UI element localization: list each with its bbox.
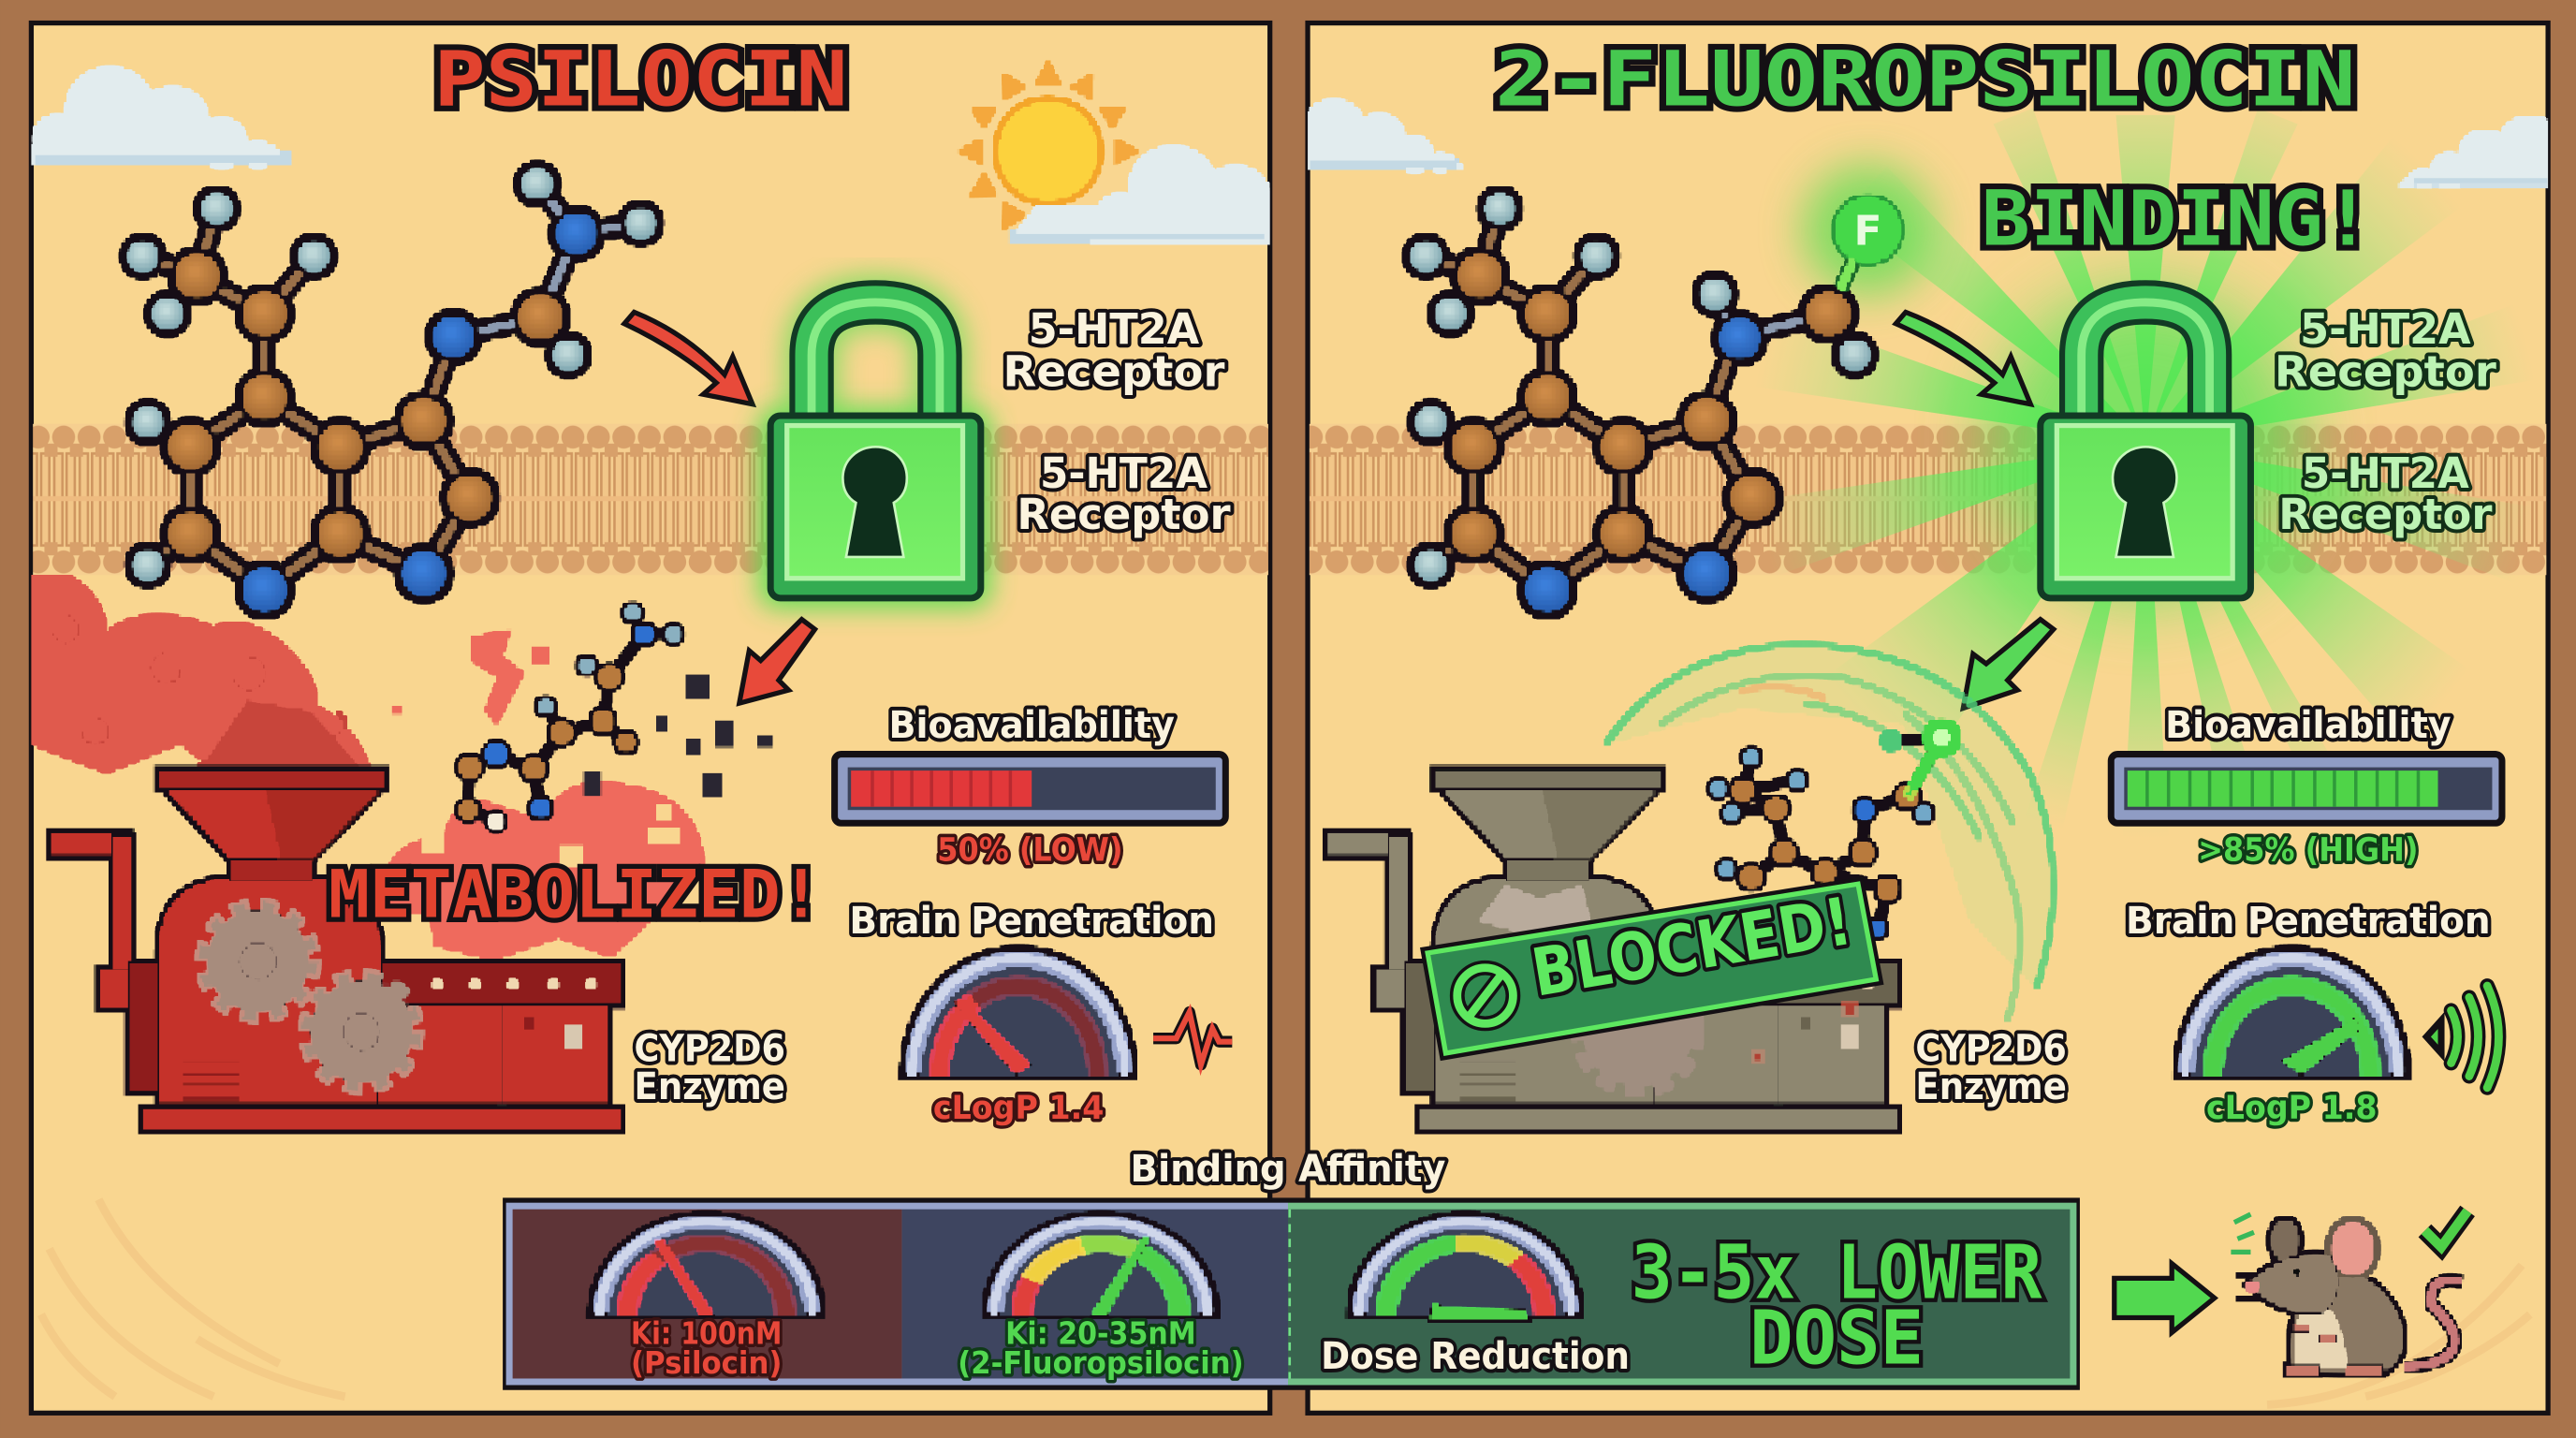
callout: 3-5x lower dose: DOSE bbox=[1749, 1296, 1924, 1382]
mouse bbox=[2237, 1219, 2461, 1375]
grinder: CYP2D6 enzyme, red bbox=[51, 769, 621, 1130]
icon: check mark bbox=[2424, 1211, 2467, 1247]
label: 5-HT2A receptor lower left: Receptor bbox=[1017, 490, 1231, 539]
banner: blocked bbox=[1427, 883, 1876, 1053]
cloud: left top right bbox=[1007, 144, 1270, 245]
text: Ki 20-35nM 2-fluoropsilocin: Ki: 20-35nM bbox=[1005, 1315, 1196, 1352]
cloud: left top left bbox=[28, 67, 291, 168]
panel: 2-fluoropsilocin bbox=[1308, 23, 2548, 1413]
label: bioavailability left: Bioavailability bbox=[889, 703, 1175, 747]
gauge: 2-fluoropsilocin affinity bbox=[986, 1214, 1216, 1314]
bar: bioavailability right bbox=[2111, 755, 2502, 823]
label: 5-HT2A receptor lower right: Receptor bbox=[2278, 490, 2493, 539]
text: Ki 100nM psilocin: Ki: 100nM bbox=[631, 1315, 782, 1352]
label: CYP2D6 enzyme right bbox=[1915, 1027, 2067, 1108]
callout: 3-5x lower dose bbox=[1632, 1229, 2042, 1382]
icon: strong signal bbox=[2426, 986, 2498, 1088]
text: Ki 20-35nM 2-fluoropsilocin bbox=[958, 1315, 1244, 1381]
molecule: 2-fluoropsilocin: F bbox=[1854, 207, 1882, 255]
panel: binding affinity strip bbox=[503, 1197, 2080, 1390]
label: 5-HT2A receptor upper left bbox=[1003, 304, 1225, 396]
label: CYP2D6 enzyme right: CYP2D6 bbox=[1915, 1027, 2067, 1071]
label: CYP2D6 enzyme left: Enzyme bbox=[634, 1064, 785, 1108]
sun bbox=[959, 63, 1137, 234]
panel: psilocin bbox=[31, 23, 1270, 1413]
label: CYP2D6 enzyme left: CYP2D6 bbox=[634, 1027, 785, 1071]
sand wisps lower left bbox=[41, 1199, 345, 1397]
text: Ki 100nM psilocin: (Psilocin) bbox=[631, 1344, 782, 1381]
bar: bioavailability left bbox=[835, 755, 1225, 823]
label: CYP2D6 enzyme right: Enzyme bbox=[1915, 1064, 2067, 1108]
label: 5-HT2A receptor upper right: 5-HT2A bbox=[2300, 304, 2471, 354]
label: metabolized: METABOLIZED! bbox=[329, 856, 822, 932]
arrow: molecule to receptor (green) bbox=[1895, 312, 2030, 404]
arrow: receptor to enzyme (green) bbox=[1963, 620, 2054, 708]
value: cLogP 1.8: cLogP 1.8 bbox=[2206, 1089, 2378, 1127]
icon: weak pulse bbox=[1153, 1012, 1232, 1064]
cloud: right top left bbox=[1308, 97, 1464, 174]
label: 5-HT2A receptor lower left: 5-HT2A bbox=[1040, 448, 1208, 498]
gauge: dose reduction bbox=[1351, 1214, 1580, 1320]
callout: 3-5x lower dose: 3-5x LOWER bbox=[1632, 1229, 2042, 1315]
gauge: brain penetration right bbox=[2176, 949, 2407, 1075]
broken molecule fragments bbox=[459, 605, 770, 829]
membrane: right bbox=[1310, 424, 2546, 575]
lock: receptor, left bbox=[759, 302, 990, 608]
heading: binding affinity: Binding Affinity bbox=[1131, 1147, 1445, 1191]
molecule on grinder bbox=[1710, 720, 1960, 936]
label: dose reduction: Dose Reduction bbox=[1321, 1334, 1630, 1378]
splash behind broken molecule bbox=[381, 631, 703, 960]
sand wisps lower right bbox=[2267, 1265, 2530, 1405]
label: 5-HT2A receptor upper left: 5-HT2A bbox=[1029, 304, 1200, 354]
text: Ki 100nM psilocin bbox=[631, 1315, 782, 1381]
icon: pulse highlight bbox=[1153, 1012, 1232, 1064]
lock: receptor, right bbox=[2041, 302, 2250, 598]
label: 5-HT2A receptor upper left: Receptor bbox=[1003, 346, 1225, 396]
label: 5-HT2A receptor lower right: 5-HT2A bbox=[2302, 448, 2470, 498]
membrane: left bbox=[33, 424, 1268, 575]
title: 2-fluoropsilocin: 2-FLUOROPSILOCIN bbox=[1495, 36, 2356, 124]
marks: alert lines bbox=[2231, 1214, 2254, 1252]
label: binding: BINDING! bbox=[1982, 175, 2372, 263]
value: over 85% high: >85% (HIGH) bbox=[2198, 831, 2418, 870]
arrow: molecule to receptor (red) bbox=[624, 312, 753, 404]
label: brain penetration left: Brain Penetration bbox=[849, 899, 1214, 943]
cloud: right top right bbox=[2398, 116, 2548, 189]
label: 5-HT2A receptor upper right bbox=[2275, 304, 2496, 396]
arrow: receptor to enzyme (red) bbox=[739, 620, 815, 703]
title: psilocin: PSILOCIN bbox=[433, 36, 848, 124]
value: cLogP 1.4: cLogP 1.4 bbox=[933, 1089, 1104, 1127]
red smoke cloud bbox=[0, 575, 370, 772]
label: 5-HT2A receptor lower left bbox=[1017, 448, 1231, 539]
green shield swirl bbox=[1606, 644, 2054, 1019]
label: 5-HT2A receptor lower right bbox=[2278, 448, 2493, 539]
label: brain penetration right: Brain Penetration bbox=[2126, 899, 2491, 943]
molecule: psilocin bbox=[124, 166, 659, 614]
label: bioavailability right: Bioavailability bbox=[2165, 703, 2452, 747]
text: Ki 20-35nM 2-fluoropsilocin: (2-Fluoropsilocin) bbox=[958, 1344, 1244, 1381]
icon: check mark highlight bbox=[2424, 1211, 2467, 1247]
burst rays around lock bbox=[1753, 108, 2537, 838]
arrow: to mouse bbox=[2115, 1264, 2215, 1332]
gauge: psilocin affinity bbox=[592, 1214, 822, 1314]
label: CYP2D6 enzyme left bbox=[634, 1027, 785, 1108]
value: 50% low: 50% (LOW) bbox=[937, 831, 1123, 870]
banner: blocked: BLOCKED! bbox=[1527, 883, 1857, 1012]
molecule: 2-fluoropsilocin bbox=[1408, 165, 1934, 614]
grinder: CYP2D6 enzyme, grey bbox=[1327, 769, 1897, 1130]
label: 5-HT2A receptor upper right: Receptor bbox=[2275, 346, 2496, 396]
gauge: brain penetration left bbox=[903, 949, 1134, 1075]
